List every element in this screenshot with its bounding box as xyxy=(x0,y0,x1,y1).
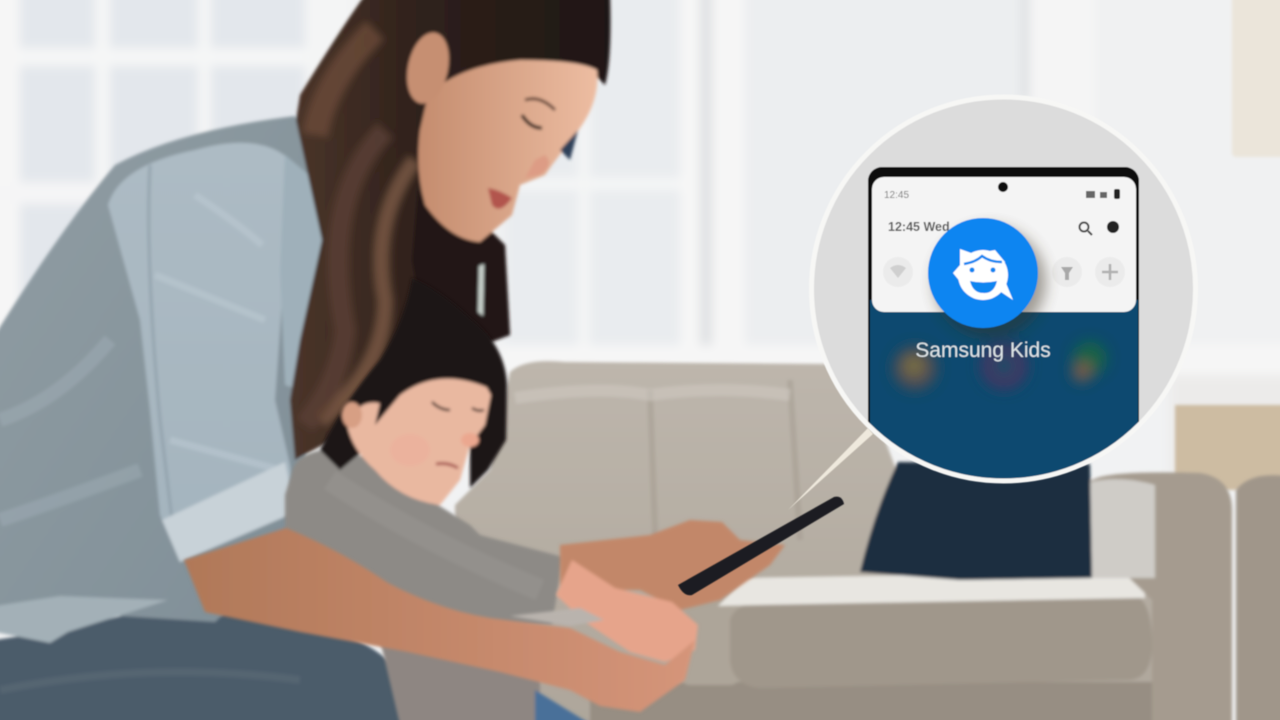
jeans xyxy=(0,605,418,720)
child sweater xyxy=(285,448,563,625)
shirt body xyxy=(0,116,330,622)
status bar time: 12:45 xyxy=(884,190,909,201)
woman xyxy=(0,0,610,720)
ear xyxy=(401,29,455,107)
notification panel xyxy=(872,177,1136,312)
hair back xyxy=(290,0,610,460)
camera hole xyxy=(998,182,1008,192)
child ear xyxy=(342,402,362,428)
toggle icons xyxy=(883,257,1125,287)
cuff xyxy=(162,462,296,562)
search icon xyxy=(1080,222,1092,235)
child lower body xyxy=(380,640,540,720)
child hair xyxy=(320,278,507,488)
dark hair under chin xyxy=(412,190,510,350)
callout pointer xyxy=(788,428,873,510)
lens ring xyxy=(812,97,1196,481)
wallpaper xyxy=(870,300,1138,500)
arms and hands xyxy=(184,520,785,712)
navy pillow xyxy=(860,462,1092,580)
handheld phone xyxy=(678,497,844,595)
lens background xyxy=(810,96,1196,482)
sleeve xyxy=(108,143,296,562)
status icons xyxy=(1086,189,1120,199)
app label: Samsung Kids xyxy=(915,339,1051,362)
icon shadow xyxy=(934,226,1046,338)
far right chair xyxy=(1236,475,1280,720)
hair highlights xyxy=(305,30,415,425)
child's hand xyxy=(556,560,698,662)
seat cushion xyxy=(730,598,1152,688)
icon: Samsung Kids xyxy=(928,218,1038,328)
lamp shade xyxy=(1232,0,1280,157)
sofa seat base xyxy=(590,682,1230,720)
shirt hem xyxy=(0,596,168,643)
cushion white top xyxy=(718,572,1145,606)
child fringe xyxy=(375,360,495,425)
magnifier callout xyxy=(810,96,1196,507)
settings icon xyxy=(1107,221,1119,233)
panel clock: 12:45 Wed xyxy=(888,220,950,234)
sofa xyxy=(455,361,1280,720)
child face xyxy=(347,374,491,505)
sofa back xyxy=(455,361,1232,720)
wooden side table xyxy=(1175,405,1280,490)
face xyxy=(418,60,597,242)
child xyxy=(285,278,592,720)
zoomed phone bezel xyxy=(867,166,1140,424)
armrest xyxy=(1090,472,1232,720)
eyes, mouth and far cheek xyxy=(522,115,542,128)
blurred app icons xyxy=(893,341,1107,390)
woman's forearm and hand xyxy=(184,528,695,712)
sleeve placket xyxy=(280,155,322,390)
window gap in hair xyxy=(478,264,484,316)
far forearm and hand xyxy=(560,520,785,610)
bracelet hint xyxy=(510,608,604,626)
child eyes and mouth xyxy=(432,402,484,411)
